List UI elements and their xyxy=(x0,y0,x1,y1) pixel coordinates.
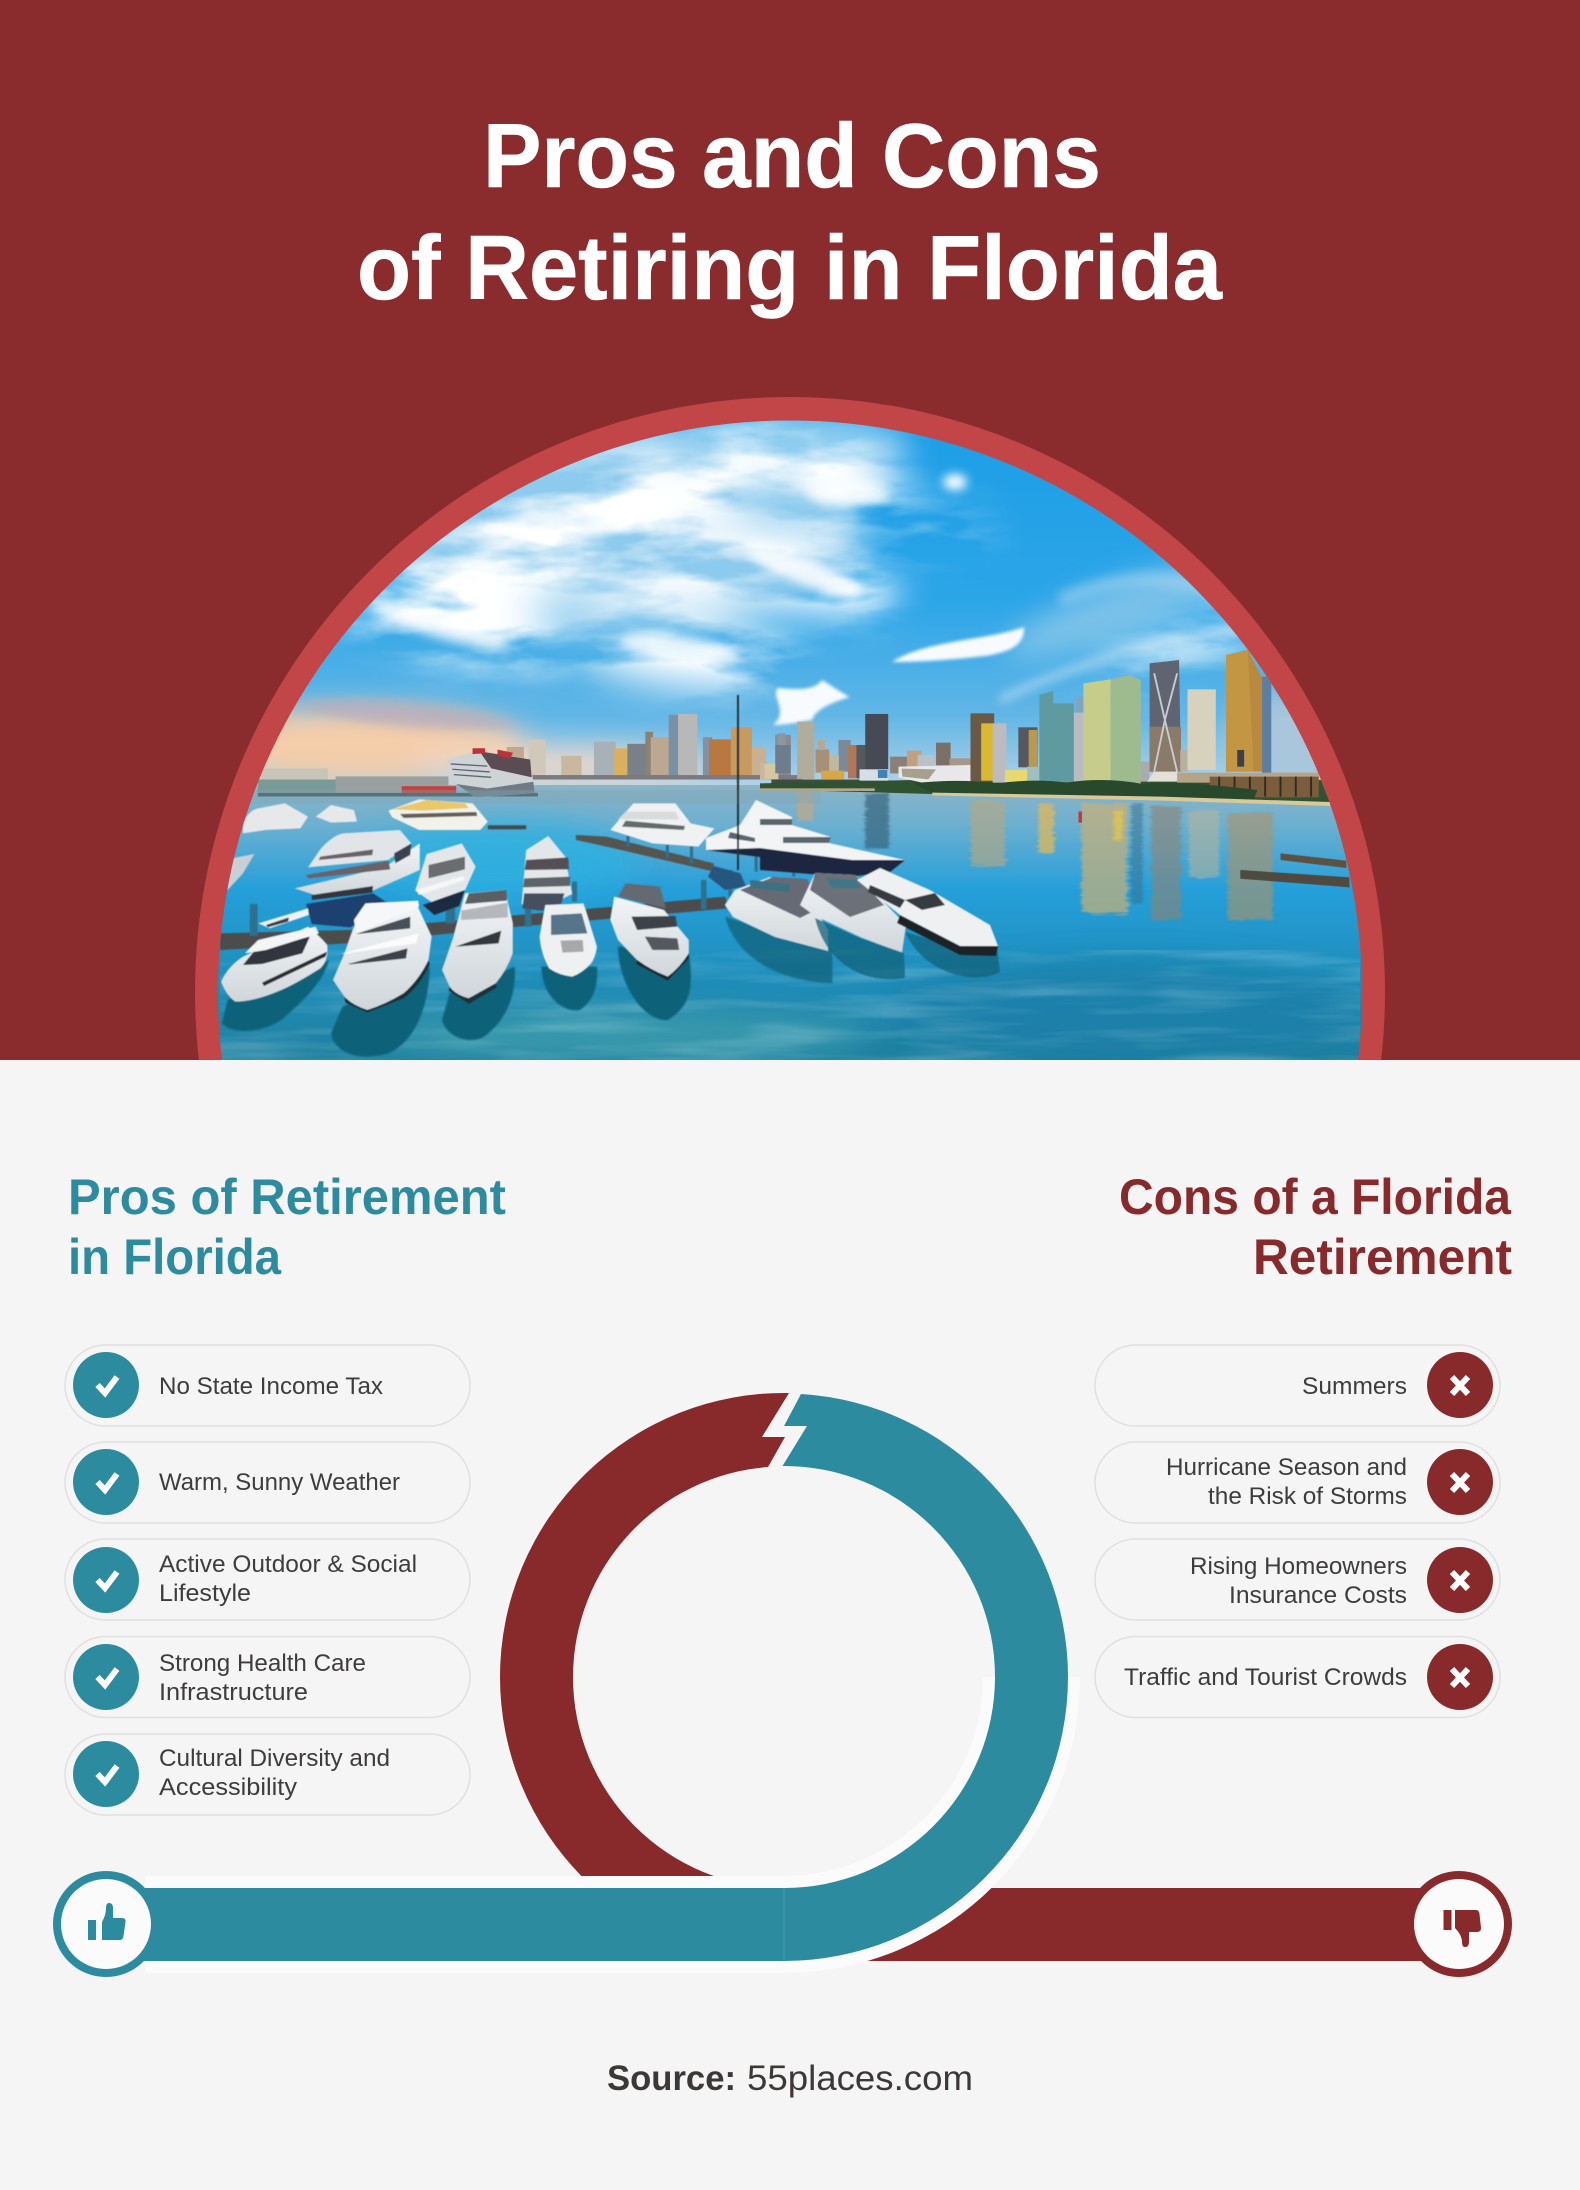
con item: summers xyxy=(1095,1345,1500,1426)
distant yachts xyxy=(243,803,308,833)
pro item: cultural diversity and accessibility: Accessibility xyxy=(159,1774,297,1801)
light halo xyxy=(145,1677,1080,1973)
F boat xyxy=(540,903,597,977)
D boat xyxy=(333,905,432,1010)
reflections xyxy=(797,791,1273,920)
heading: cons: Cons of a Florida xyxy=(1119,1169,1512,1225)
arena xyxy=(899,765,970,784)
pros list xyxy=(65,1345,470,1815)
pro item: warm sunny weather: Warm, Sunny Weather xyxy=(159,1469,400,1496)
lower half graphic: pros and cons ring xyxy=(130,1393,1440,1973)
title xyxy=(357,106,1223,319)
shoreline xyxy=(932,793,1330,806)
skyline right xyxy=(760,650,1349,920)
boat J xyxy=(800,873,906,953)
con item: insurance costs: Rising Homeowners xyxy=(1190,1553,1407,1580)
con item: insurance costs xyxy=(1095,1539,1500,1620)
sky xyxy=(253,420,1327,795)
water tone patches xyxy=(360,820,1370,1061)
pro item: active outdoor and social lifestyle xyxy=(65,1539,470,1620)
E boat xyxy=(442,890,513,998)
big yacht xyxy=(306,893,389,927)
pro item: cultural diversity and accessibility: Cultural Diversity and xyxy=(159,1745,390,1772)
horizon glow xyxy=(257,420,1322,785)
heading: pros xyxy=(68,1169,506,1285)
con item: traffic and tourist crowds: Traffic and Tourist Crowds xyxy=(1124,1664,1407,1691)
heading: cons: Retirement xyxy=(1253,1229,1512,1285)
pro item: strong health care infrastructure: Strong Health Care xyxy=(159,1650,366,1677)
bright cloud cores xyxy=(367,474,967,672)
pros ring segment xyxy=(782,1394,1068,1961)
M yacht xyxy=(610,803,714,847)
pro item: no state income tax: No State Income Tax xyxy=(159,1373,383,1400)
pro item: strong health care infrastructure: Infrastructure xyxy=(159,1679,308,1706)
palms xyxy=(913,780,1258,799)
docks xyxy=(220,897,729,950)
con item: hurricane season: Hurricane Season and xyxy=(1166,1454,1407,1481)
blue tender xyxy=(708,866,746,890)
G boat xyxy=(610,897,689,977)
cons bar xyxy=(800,1888,1440,1961)
pros bar xyxy=(130,1888,784,1961)
con item: hurricane season xyxy=(1095,1442,1500,1523)
title: Pros and Cons xyxy=(483,106,1101,207)
shore vegetation xyxy=(760,780,1330,803)
heading: pros: in Florida xyxy=(68,1229,282,1285)
source line: 55places.com xyxy=(747,2059,973,2098)
photo: Miami marina and skyline xyxy=(190,400,1380,1061)
con item: traffic and tourist crowds xyxy=(1095,1636,1500,1718)
wooden piers xyxy=(1240,870,1349,887)
pro item: warm sunny weather xyxy=(65,1442,470,1523)
heading: pros: Pros of Retirement xyxy=(68,1169,506,1225)
boats drawn in crop coordinates xyxy=(220,790,832,1057)
cons ring segment xyxy=(500,1393,789,1961)
top water reflection xyxy=(251,790,820,803)
boat reflections xyxy=(222,917,832,1057)
pro item: active outdoor and social lifestyle: Active Outdoor & Social xyxy=(159,1551,417,1578)
clouds xyxy=(324,423,1271,699)
sailboat mast xyxy=(737,695,739,870)
boat K xyxy=(857,868,998,946)
pro item: no state income tax xyxy=(65,1345,470,1426)
skyline left xyxy=(258,714,888,797)
low building xyxy=(1177,773,1319,783)
towers xyxy=(970,713,994,782)
pro item: active outdoor and social lifestyle: Lifestyle xyxy=(159,1580,251,1607)
con item: hurricane season: the Risk of Storms xyxy=(1208,1483,1407,1510)
icon: thumbs down xyxy=(1406,1871,1512,1977)
header panel xyxy=(0,0,1580,1060)
pilings xyxy=(250,832,795,936)
left edge boat xyxy=(227,854,255,890)
large yacht xyxy=(706,848,905,877)
small clouds near the skyline xyxy=(773,627,1024,725)
C boat xyxy=(221,927,327,1002)
arch ring xyxy=(195,397,1385,1060)
water ripples xyxy=(220,950,1360,1060)
con item: insurance costs: Insurance Costs xyxy=(1229,1582,1407,1609)
pro item: cultural diversity and accessibility xyxy=(65,1734,470,1815)
source line xyxy=(607,2059,973,2098)
water xyxy=(200,785,1380,1060)
buoy xyxy=(1078,811,1082,823)
third yacht center xyxy=(522,836,572,909)
con item: summers: Summers xyxy=(1302,1373,1407,1400)
second yacht xyxy=(415,843,476,904)
title: of Retiring in Florida xyxy=(357,218,1223,319)
cons list xyxy=(1095,1345,1500,1718)
boat I xyxy=(725,877,828,951)
icon: thumbs up xyxy=(53,1871,159,1977)
heading: cons xyxy=(1119,1169,1512,1285)
marina boats xyxy=(220,695,1000,1057)
source line: Source: xyxy=(607,2059,736,2098)
boat J and K reflections xyxy=(815,918,905,979)
pro item: strong health care infrastructure xyxy=(65,1636,470,1718)
cruise ship xyxy=(447,751,535,797)
